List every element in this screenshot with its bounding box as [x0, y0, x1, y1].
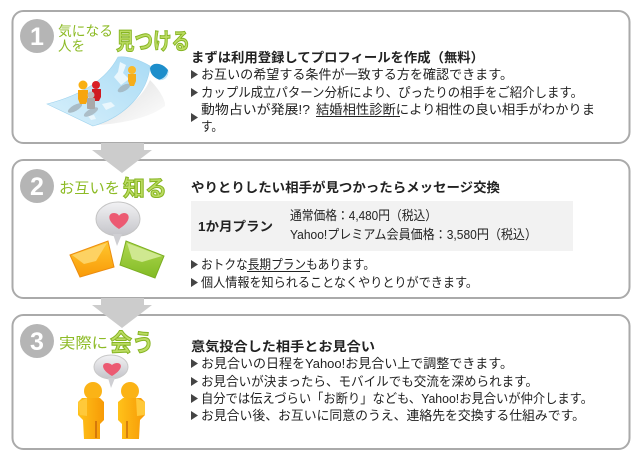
step 2 number badge: 2 — [30, 173, 44, 201]
arrow: step 1 to 2 — [92, 143, 152, 173]
price table: 1か月プラン — [198, 219, 273, 234]
step 1 bullets: 結婚相性診断により相性の良い相手がわかりま — [316, 102, 595, 117]
step 1 title: 人を — [58, 38, 85, 54]
step 2 number badge — [20, 169, 54, 203]
step 1 number badge: 1 — [30, 23, 44, 51]
step 2 heading: やりとりしたい相手が見つかったらメッセージ交換 — [191, 180, 500, 195]
step 2 title: 知る — [123, 176, 167, 201]
panel: step 2 — [12, 160, 630, 298]
step 2 bullets: おトクな長期プランもあります。 — [201, 257, 375, 272]
step 3 number badge — [20, 324, 54, 358]
step 1 title: 見つける — [116, 28, 190, 54]
step 1 bullets: 動物占いが発展!? — [201, 102, 310, 117]
step 2 title — [59, 176, 167, 201]
step 3 bullets: お見合いの日程をYahoo!お見合い上で調整できます。 — [201, 356, 513, 371]
price table: 通常価格：4,480円（税込） — [290, 208, 437, 223]
step 1 title: 気になる — [58, 23, 113, 39]
step 1 bullets: カップル成立パターン分析により、ぴったりの相手をご紹介します。 — [201, 85, 583, 100]
step 3 title — [59, 330, 154, 357]
step 3 bullets: お見合い後、お互いに同意のうえ、連絡先を交換する仕組みです。 — [201, 408, 585, 423]
step 3 title: 会う — [110, 330, 154, 357]
step 1 bullets: お互いの希望する条件が一致する方を確認できます。 — [201, 67, 513, 82]
step 1 heading: まずは利用登録してプロフィールを作成（無料） — [191, 50, 484, 65]
panel: step 1 — [12, 11, 630, 143]
step 2 bullets: 個人情報を知られることなくやりとりができます。 — [201, 275, 478, 290]
step 1 bullets: す。 — [201, 119, 223, 134]
icon: map with people — [47, 57, 168, 126]
icon: two people with heart bubble — [78, 355, 145, 439]
arrow: step 2 to 3 — [92, 298, 152, 328]
price table — [191, 201, 573, 251]
panel: step 3 — [12, 315, 630, 449]
step 3 heading: 意気投合した相手とお見合い — [191, 339, 375, 354]
step 1 title — [58, 23, 190, 54]
step 1 number badge — [20, 19, 54, 53]
step 3 bullets: 自分では伝えづらい「お断り」なども、Yahoo!お見合いが仲介します。 — [201, 391, 593, 406]
step 2 bullets — [191, 257, 478, 290]
step 1 bullets — [191, 67, 595, 134]
step 3 title: 実際に — [59, 335, 108, 352]
step 2 title: お互いを — [59, 180, 120, 197]
step 3 bullets — [191, 356, 593, 423]
icon: envelopes with heart bubble — [70, 202, 164, 278]
step 3 number badge: 3 — [30, 328, 44, 356]
step 3 bullets: お見合いが決まったら、モバイルでも交流を深められます。 — [201, 374, 538, 389]
price table: Yahoo!プレミアム会員価格：3,580円（税込） — [290, 227, 537, 242]
